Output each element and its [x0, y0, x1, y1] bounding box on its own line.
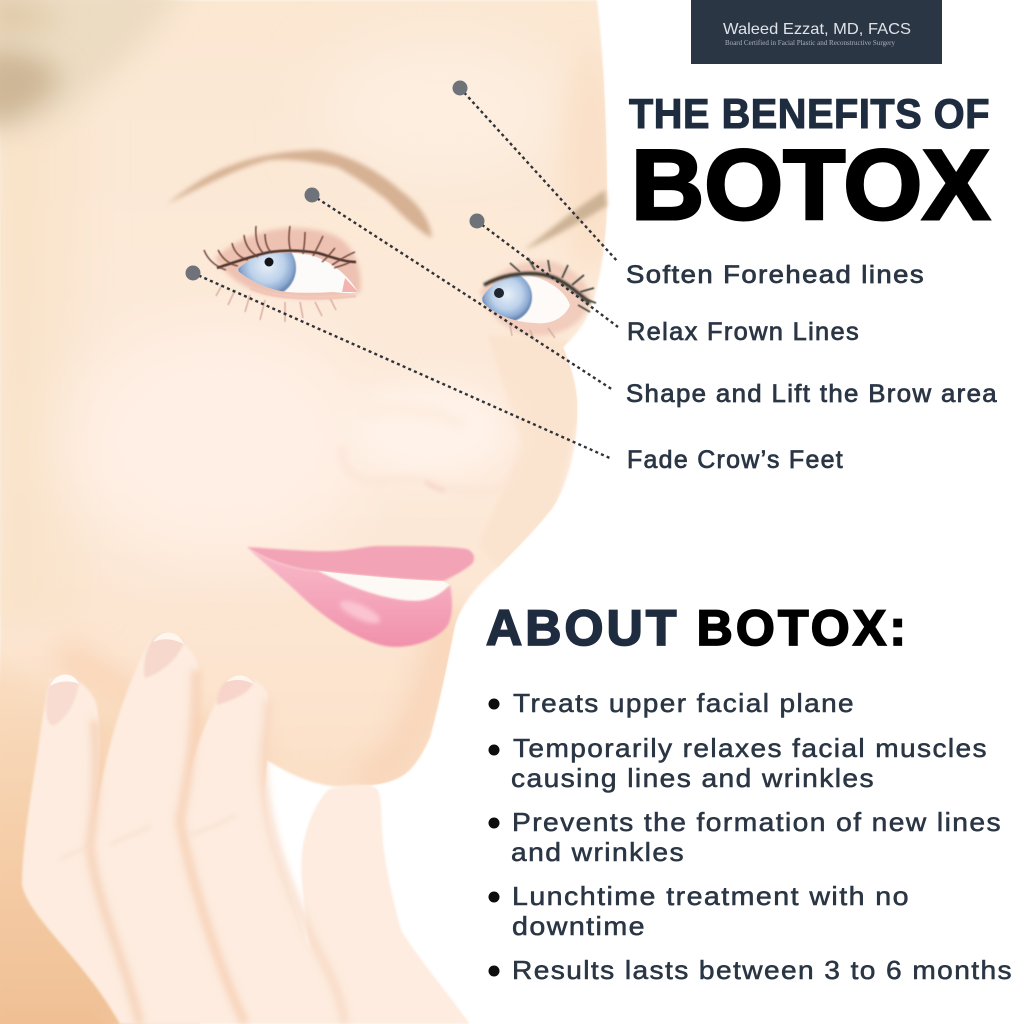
lips	[247, 546, 474, 647]
credentials: Board Certified in Facial Plastic and Reconstructive Surgery	[725, 38, 895, 47]
title	[629, 90, 990, 240]
bullet item 5: Results lasts between 3 to 6 months	[512, 955, 1013, 985]
right eye	[480, 258, 596, 340]
header badge	[691, 0, 942, 64]
left eyebrow	[167, 150, 432, 238]
pointer: frown lines	[470, 214, 618, 327]
title: BOTOX: BOTOX	[631, 129, 990, 240]
right eyebrow	[524, 190, 607, 250]
pointer: brow	[304, 188, 613, 390]
finger separation shadows	[90, 720, 140, 1024]
bullet item 2: causing lines and wrinkles	[511, 763, 875, 793]
face and neck skin	[0, 0, 614, 1024]
benefit labels	[626, 261, 998, 474]
doctor name: Waleed Ezzat, MD, FACS	[723, 21, 911, 38]
bullet item 4: Lunchtime treatment with no	[512, 881, 910, 911]
bullet item 2: Temporarily relaxes facial muscles	[513, 733, 988, 763]
bullet item 3: and wrinkles	[511, 837, 685, 867]
far cheek and nose shading	[342, 380, 520, 491]
bullet item 2	[488, 733, 988, 793]
benefit labels: Fade Crow’s Feet	[627, 446, 844, 474]
benefit labels: Relax Frown Lines	[627, 318, 860, 346]
title: THE BENEFITS OF	[629, 90, 990, 137]
bullet item 3: Prevents the formation of new lines	[512, 807, 1002, 837]
pointer: crow's feet	[186, 266, 612, 459]
about list	[488, 688, 1013, 985]
bullet item 4	[488, 881, 910, 941]
neck shadow	[0, 650, 150, 1024]
benefit labels: Soften Forehead lines	[626, 261, 925, 289]
bullet item 3	[488, 807, 1002, 867]
annotation pointers: dotted leader lines with markers	[186, 80, 618, 459]
pointer: forehead	[452, 80, 618, 262]
far cheek	[492, 338, 577, 568]
hand and fingers	[22, 632, 470, 1024]
portrait photo: woman's face with hand	[0, 0, 614, 1024]
hair	[0, 0, 190, 130]
benefit labels: Shape and Lift the Brow area	[626, 380, 998, 408]
left eye	[204, 226, 361, 322]
about heading: ABOUT BOTOX:	[486, 600, 906, 656]
fingernails	[46, 632, 254, 725]
bullet item 4: downtime	[512, 911, 646, 941]
bullet item 1: Treats upper facial plane	[513, 688, 855, 718]
